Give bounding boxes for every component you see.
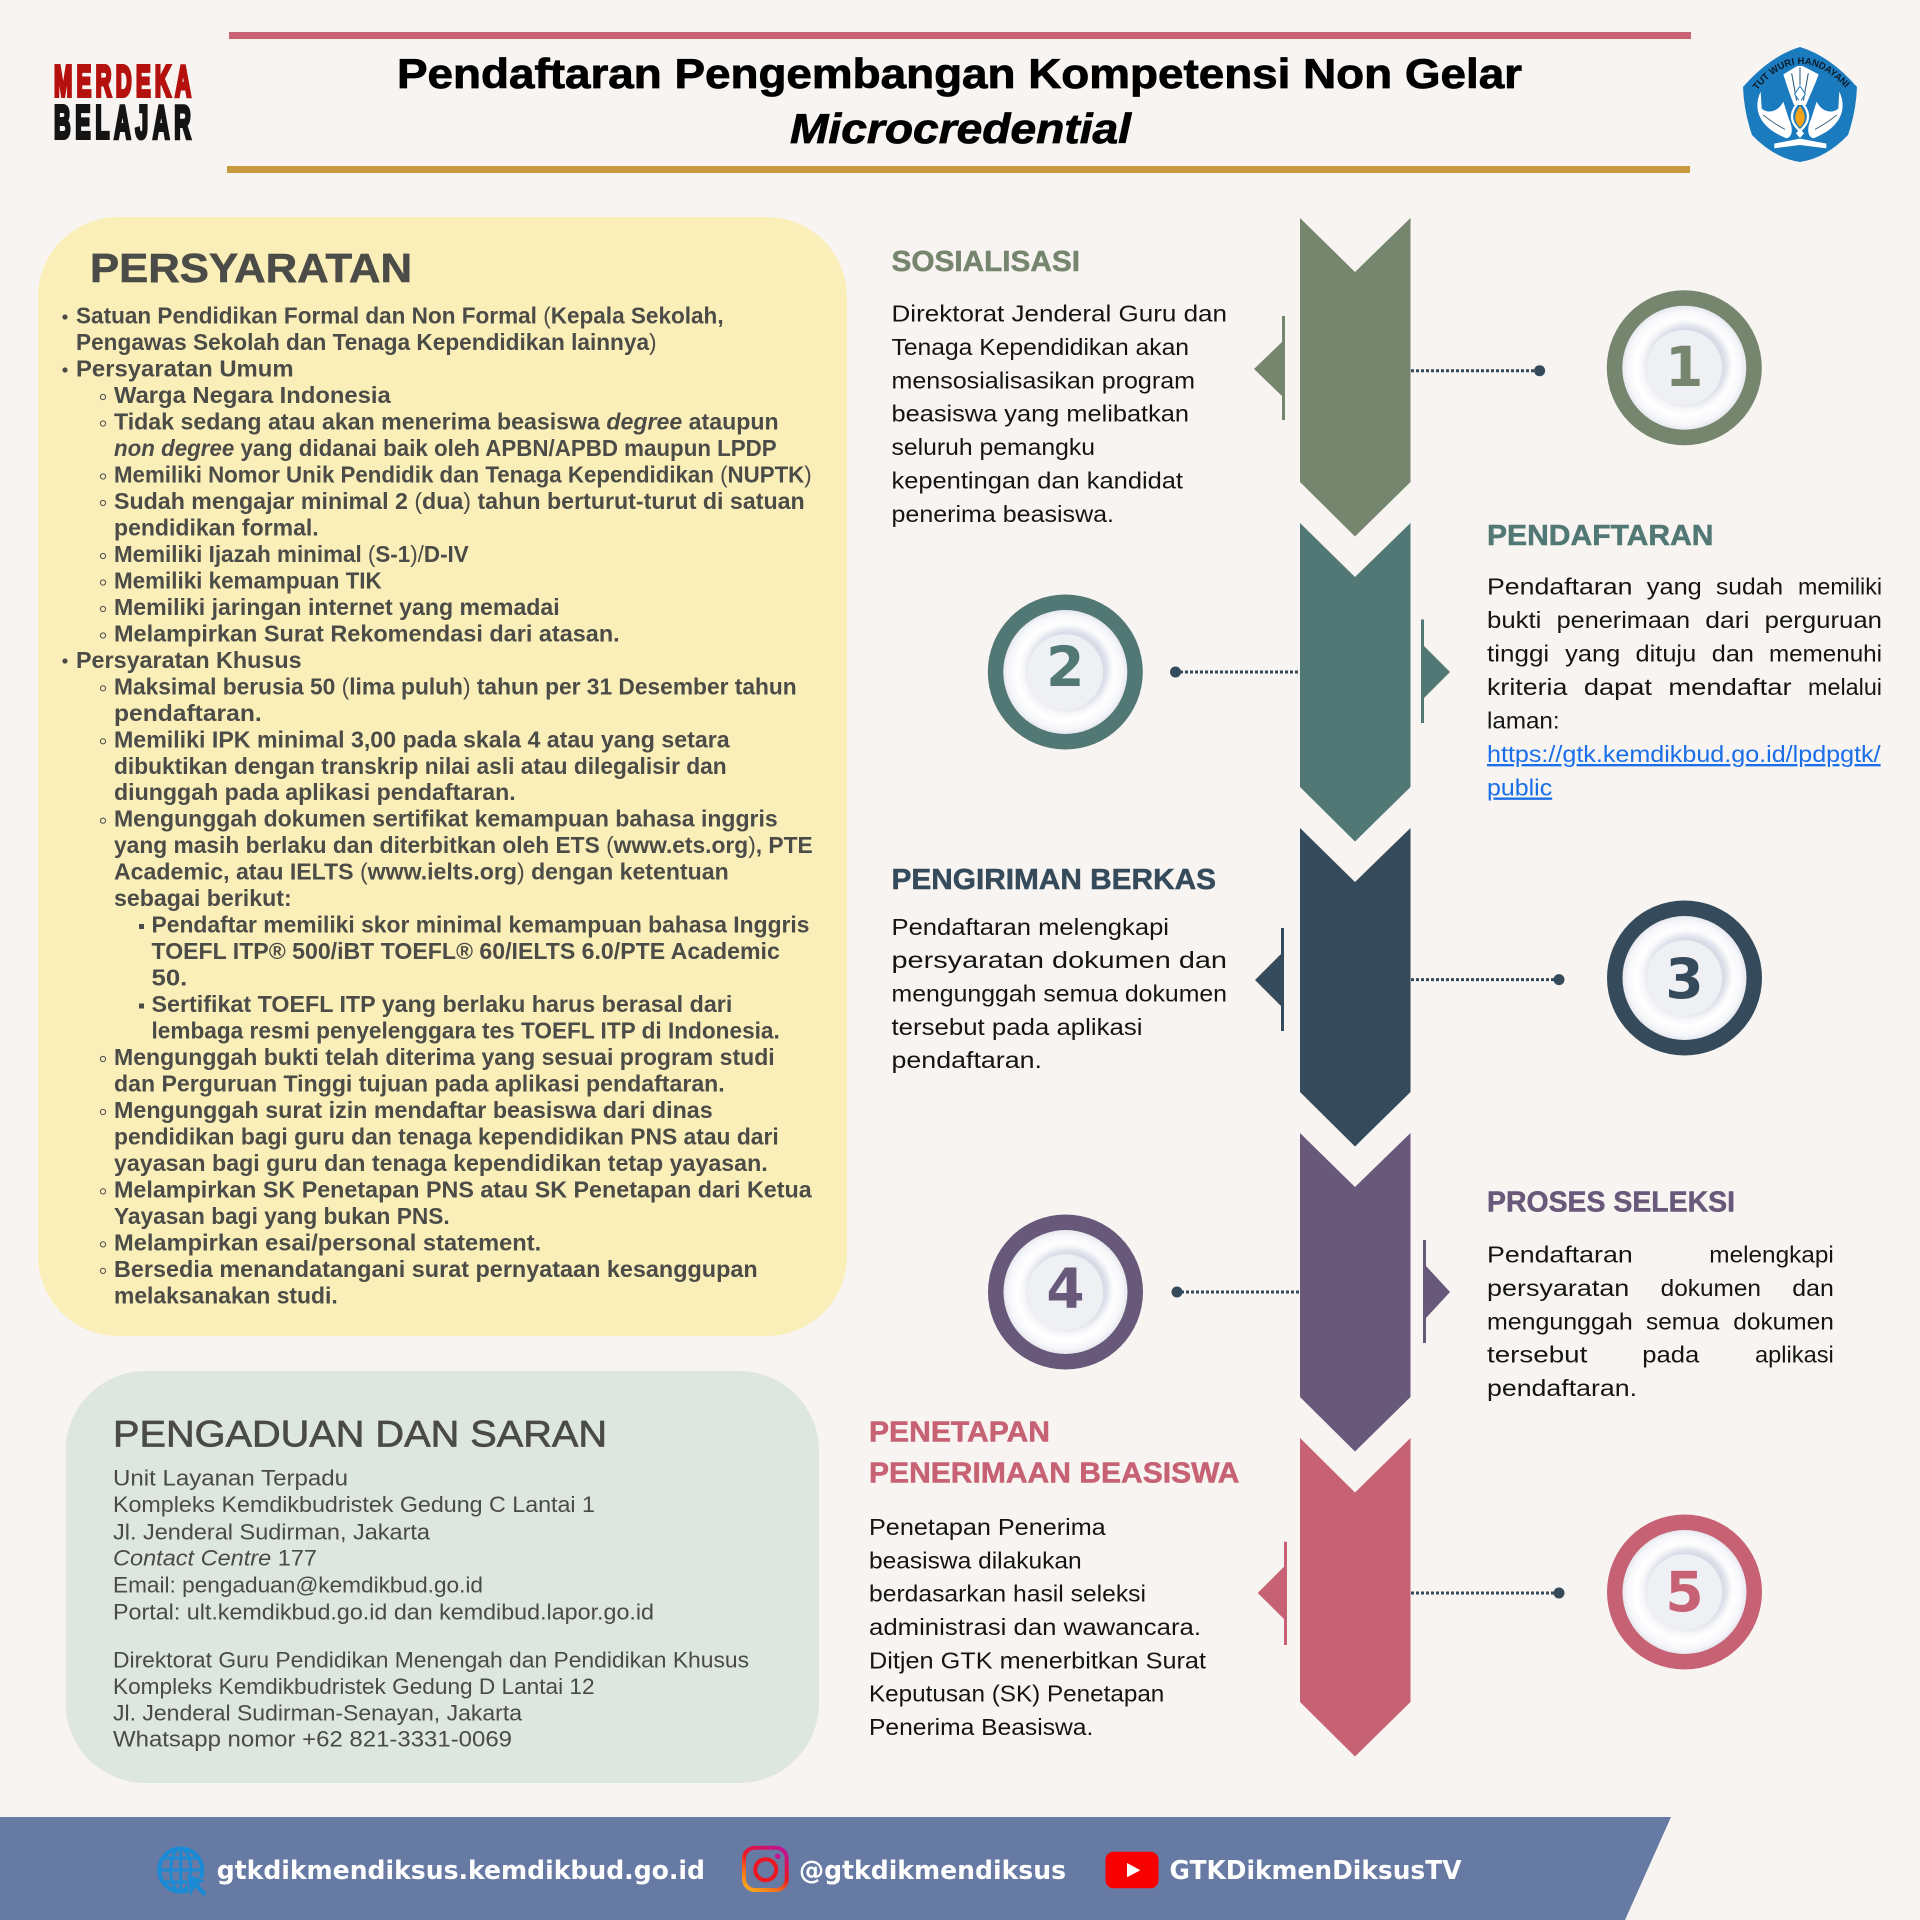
step 5 chevron [1258, 1438, 1410, 1756]
step 4 chevron [1300, 1133, 1450, 1452]
requirements list: dibuktikan dengan transkrip nilai asli atau dilegalisir dan [114, 753, 727, 779]
text block: proses seleksi: tersebut [1487, 1342, 1588, 1368]
requirements list: Pendaftar memiliki skor minimal kemampuan bahasa Inggris [152, 912, 810, 938]
title block [227, 32, 1691, 173]
requirements list: Yayasan bagi yang bukan PNS. [114, 1203, 450, 1229]
title block: Pendaftaran Pengembangan Kompetensi Non Gelar [397, 50, 1522, 97]
text block: sosialisasi: beasiswa yang melibatkan [892, 401, 1189, 427]
requirements list: Sertifikat TOEFL ITP yang berlaku harus berasal dari [152, 991, 732, 1017]
text block: sosialisasi: Tenaga Kependidikan akan [892, 334, 1189, 360]
connector 2 [1170, 666, 1298, 678]
text block: sosialisasi: Direktorat Jenderal Guru dan [892, 300, 1227, 326]
title block: Microcredential [790, 105, 1132, 152]
contact details: Kompleks Kemdikbudristek Gedung D Lantai 12 [113, 1674, 595, 1699]
requirements list: Satuan Pendidikan Formal dan Non Formal (Kepala Sekolah, [76, 303, 724, 329]
instagram label: @gtkdikmendiksus [799, 1856, 1066, 1886]
logo: Merdeka Belajar: MERDEKA [54, 58, 195, 106]
connector 3 [1411, 974, 1564, 985]
text block: pendaftaran: tinggi [1487, 641, 1549, 667]
text block: pendaftaran: kriteria [1487, 674, 1568, 700]
text block: pendaftaran: perguruan [1765, 607, 1882, 633]
text block: pendaftaran: yang [1565, 641, 1620, 667]
connector 1 [1411, 365, 1545, 376]
requirements list: yang masih berlaku dan diterbitkan oleh ETS (www.ets.org), PTE [114, 832, 813, 858]
text block: proses seleksi: mengunggah [1487, 1308, 1633, 1334]
text block: penetapan penerimaan beasiswa [869, 1417, 1240, 1740]
requirements list: Bersedia menandatangani surat pernyataan kesanggupan [114, 1256, 758, 1282]
heading: persyaratan: PERSYARATAN [90, 245, 412, 291]
text block: pendaftaran: mendaftar [1668, 674, 1792, 700]
icon: globe [159, 1848, 207, 1898]
icon: instagram [744, 1848, 787, 1890]
number badge 2: 2 [1046, 635, 1084, 699]
step 3 chevron [1255, 828, 1410, 1146]
website label: gtkdikmendiksus.kemdikbud.go.id [217, 1856, 705, 1886]
step 1 chevron [1254, 218, 1410, 536]
text block: pendaftaran: public [1487, 774, 1552, 800]
text block: pendaftaran: dapat [1584, 674, 1653, 700]
text block: penetapan penerimaan beasiswa: PENERIMAAN BEASISWA [869, 1457, 1240, 1489]
text block: sosialisasi: penerima beasiswa. [892, 501, 1114, 527]
requirements list [62, 303, 813, 1308]
logo: Merdeka Belajar: BELAJAR [54, 96, 196, 148]
requirements list: Tidak sedang atau akan menerima beasiswa degree ataupun [114, 408, 779, 434]
text block: pendaftaran: dari [1705, 607, 1750, 633]
requirements list: Academic, atau IELTS (www.ielts.org) dengan ketentuan [114, 859, 729, 885]
text block: pengiriman berkas [892, 864, 1227, 1073]
text block: pendaftaran: penerimaan [1557, 607, 1690, 633]
number badge 2 [988, 594, 1143, 750]
contact details: Kompleks Kemdikbudristek Gedung C Lantai 1 [113, 1492, 595, 1517]
text block: pengiriman berkas: PENGIRIMAN BERKAS [892, 864, 1216, 896]
number badge 1: 1 [1665, 335, 1703, 399]
text block: proses seleksi: pada [1642, 1342, 1700, 1368]
panel: pengaduan dan saran [66, 1371, 819, 1783]
text block: pengiriman berkas: pendaftaran. [892, 1047, 1042, 1073]
text block: pendaftaran: memenuhi [1769, 641, 1882, 667]
text block: proses seleksi: aplikasi [1755, 1342, 1834, 1368]
requirements list: 50. [152, 965, 187, 991]
step 2 chevron [1300, 523, 1450, 842]
footer bar [0, 1817, 1671, 1920]
text block: proses seleksi: dan [1792, 1275, 1834, 1301]
contact details: Email: pengaduan@kemdikbud.go.id [113, 1572, 483, 1597]
contact details: Unit Layanan Terpadu [113, 1465, 348, 1490]
requirements list: Maksimal berusia 50 (lima puluh) tahun per 31 Desember tahun [114, 673, 797, 699]
text block: proses seleksi: persyaratan [1487, 1275, 1629, 1301]
requirements list: lembaga resmi penyelenggara tes TOEFL ITP di Indonesia. [152, 1018, 780, 1044]
requirements list: diunggah pada aplikasi pendaftaran. [114, 779, 516, 805]
text block: penetapan penerimaan beasiswa: administrasi dan wawancara. [869, 1614, 1201, 1640]
logo: Tut Wuri Handayani: TUT WURI HANDAYANI [1752, 57, 1850, 89]
requirements list: Mengunggah dokumen sertifikat kemampuan bahasa inggris [114, 806, 778, 832]
contact details: Direktorat Guru Pendidikan Menengah dan Pendidikan Khusus [113, 1647, 749, 1672]
requirements list: Memiliki Ijazah minimal (S-1)/D-IV [114, 541, 469, 567]
number badge 3: 3 [1665, 947, 1704, 1011]
text block: pendaftaran: Pendaftaran [1487, 574, 1632, 600]
requirements list: Memiliki jaringan internet yang memadai [114, 594, 560, 620]
requirements list: Pengawas Sekolah dan Tenaga Kependidikan lainnya) [76, 329, 657, 355]
text block: pengiriman berkas: persyaratan dokumen dan [892, 947, 1227, 973]
text block: proses seleksi: melengkapi [1709, 1241, 1834, 1267]
text block: proses seleksi: dokumen [1661, 1275, 1761, 1301]
requirements list: yayasan bagi guru dan tenaga kependidikan tetap yayasan. [114, 1150, 768, 1176]
requirements list: Persyaratan Khusus [76, 647, 302, 673]
panel: persyaratan [38, 217, 847, 1336]
connector 4 [1172, 1286, 1300, 1298]
text block: pendaftaran: dan [1712, 641, 1754, 667]
text block: pendaftaran: dituju [1636, 641, 1696, 667]
icon: youtube [1106, 1852, 1158, 1888]
requirements list: Mengunggah bukti telah diterima yang sesuai program studi [114, 1044, 775, 1070]
requirements list: Memiliki kemampuan TIK [114, 567, 382, 593]
number badge 4: 4 [1046, 1257, 1085, 1321]
text block: proses seleksi: pendaftaran. [1487, 1375, 1637, 1401]
text block: pendaftaran [1487, 520, 1882, 800]
contact details: Whatsapp nomor +62 821-3331-0069 [113, 1727, 512, 1752]
heading: pengaduan dan saran: PENGADUAN DAN SARAN [113, 1414, 607, 1455]
requirements list: non degree yang didanai baik oleh APBN/APBD maupun LPDP [114, 435, 777, 461]
text block: proses seleksi: dokumen [1733, 1308, 1834, 1334]
number badge 5 [1607, 1514, 1762, 1670]
requirements list: pendaftaran. [114, 700, 262, 726]
text block: penetapan penerimaan beasiswa: Ditjen GTK menerbitkan Surat [869, 1647, 1207, 1673]
requirements list: sebagai berikut: [114, 885, 292, 911]
contact details [113, 1465, 749, 1752]
text block: pendaftaran: sudah [1716, 574, 1783, 600]
number badge 1 [1607, 290, 1762, 445]
requirements list: pendidikan formal. [114, 514, 319, 540]
text block: proses seleksi: semua [1646, 1308, 1720, 1334]
text block: pengiriman berkas: tersebut pada aplikasi [892, 1014, 1142, 1040]
contact details: Contact Centre 177 [113, 1546, 317, 1571]
text block: penetapan penerimaan beasiswa: PENETAPAN [869, 1417, 1050, 1449]
text block: proses seleksi: Pendaftaran [1487, 1241, 1633, 1267]
text block: sosialisasi: kepentingan dan kandidat [892, 468, 1184, 494]
requirements list: Warga Negara Indonesia [114, 382, 392, 408]
text block: penetapan penerimaan beasiswa: Penerima Beasiswa. [869, 1714, 1093, 1740]
connector 5 [1411, 1588, 1564, 1598]
text block: pendaftaran: melalui [1808, 674, 1882, 700]
requirements list: TOEFL ITP® 500/iBT TOEFL® 60/IELTS 6.0/PTE Academic [152, 938, 780, 964]
contact details: Jl. Jenderal Sudirman-Senayan, Jakarta [113, 1701, 522, 1726]
number badge 4 [988, 1214, 1143, 1370]
text block: pengiriman berkas: mengunggah semua dokumen [892, 980, 1227, 1006]
requirements list: dan Perguruan Tinggi tujuan pada aplikasi pendaftaran. [114, 1070, 725, 1096]
text block: sosialisasi [892, 246, 1227, 527]
logo: Merdeka Belajar [54, 58, 196, 148]
requirements list: Melampirkan Surat Rekomendasi dari atasan. [114, 620, 620, 646]
text block: penetapan penerimaan beasiswa: Keputusan (SK) Penetapan [869, 1681, 1164, 1707]
text block: penetapan penerimaan beasiswa: Penetapan Penerima [869, 1514, 1107, 1540]
number badge 3 [1607, 900, 1762, 1056]
text block: pendaftaran: https://gtk.kemdikbud.go.id/lpdpgtk/ [1487, 741, 1881, 767]
text block: pendaftaran: PENDAFTARAN [1487, 520, 1714, 552]
requirements list: Sudah mengajar minimal 2 (dua) tahun berturut-turut di satuan [114, 488, 805, 514]
requirements list: melaksanakan studi. [114, 1282, 338, 1308]
text block: pendaftaran: bukti [1487, 607, 1541, 633]
text block: sosialisasi: mensosialisasikan program [892, 367, 1195, 393]
requirements list: Melampirkan SK Penetapan PNS atau SK Penetapan dari Ketua [114, 1176, 813, 1202]
text block: pendaftaran: laman: [1487, 708, 1560, 734]
text block: pendaftaran: yang [1647, 574, 1702, 600]
text block: penetapan penerimaan beasiswa: beasiswa dilakukan [869, 1547, 1082, 1573]
requirements list: Persyaratan Umum [76, 356, 294, 382]
text block: proses seleksi: PROSES SELEKSI [1487, 1187, 1735, 1219]
text block: pengiriman berkas: Pendaftaran melengkapi [892, 914, 1169, 940]
requirements list: pendidikan bagi guru dan tenaga kependidikan PNS atau dari [114, 1124, 779, 1150]
requirements list: Memiliki IPK minimal 3,00 pada skala 4 atau yang setara [114, 726, 731, 752]
text block: proses seleksi [1487, 1187, 1834, 1401]
contact details: Portal: ult.kemdikbud.go.id dan kemdibud.lapor.go.id [113, 1599, 654, 1624]
text block: sosialisasi: seluruh pemangku [892, 434, 1095, 460]
contact details: Jl. Jenderal Sudirman, Jakarta [113, 1519, 430, 1544]
text block: sosialisasi: SOSIALISASI [892, 246, 1080, 278]
youtube label: GTKDikmenDiksusTV [1170, 1856, 1462, 1886]
requirements list: Mengunggah surat izin mendaftar beasiswa dari dinas [114, 1097, 713, 1123]
requirements list: Memiliki Nomor Unik Pendidik dan Tenaga Kependidikan (NUPTK) [114, 462, 812, 488]
number badge 5: 5 [1665, 1560, 1704, 1624]
text block: penetapan penerimaan beasiswa: berdasarkan hasil seleksi [869, 1581, 1146, 1607]
requirements list: Melampirkan esai/personal statement. [114, 1229, 541, 1255]
logo: Tut Wuri Handayani [1743, 47, 1857, 162]
text block: pendaftaran: memiliki [1798, 574, 1882, 600]
